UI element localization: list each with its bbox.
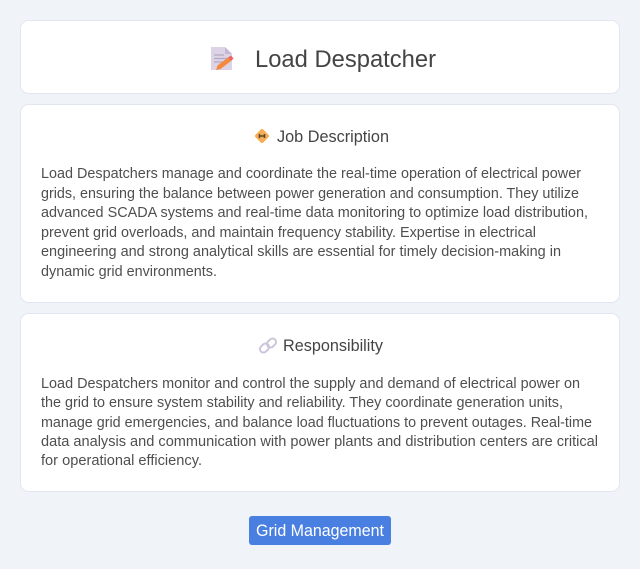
- text block: job description: grids, ensuring the balance between power generation and consumption. They utilize: [41, 186, 579, 202]
- text block: responsibility: data analysis and communication with power plants and distribution centers are critical: [41, 434, 598, 450]
- heading: job description: Job Description: [277, 128, 389, 146]
- text block: job description: Load Despatchers manage and coordinate the real-time operation of electrical power: [41, 166, 581, 182]
- panel: responsibility: [20, 314, 620, 492]
- text block: job description: [41, 166, 588, 280]
- heading: responsibility: Responsibility: [283, 337, 384, 355]
- panel: title card: [20, 20, 620, 94]
- text block: responsibility: for operational efficiency.: [41, 453, 202, 469]
- tag button: grid management: Grid Management: [256, 522, 384, 540]
- panel: job description: [20, 104, 620, 302]
- icon: document with pencil: [211, 47, 234, 70]
- text block: job description: prevent grid overloads, and maintain frequency stability. Expertise in electrical: [41, 225, 536, 241]
- text block: job description: advanced SCADA systems and real-time data monitoring to optimize load distribution,: [41, 205, 588, 221]
- title: Load Despatcher: [255, 46, 436, 73]
- text block: responsibility: Load Despatchers monitor and control the supply and demand of electrical power on: [41, 376, 580, 392]
- tag button: grid management: [249, 516, 391, 545]
- text block: responsibility: the grid to ensure system stability and reliability. They coordinate generation units,: [41, 395, 563, 411]
- text block: job description: engineering and strong analytical skills are essential for timely decision-making in: [41, 244, 561, 260]
- text block: responsibility: manage grid emergencies, and balance load fluctuations to prevent outages. Real-time: [41, 415, 592, 431]
- text block: responsibility: [41, 376, 598, 469]
- text block: job description: dynamic grid environments.: [41, 264, 217, 280]
- icon: chain link: [258, 337, 278, 354]
- icon: diamond road sign: [254, 128, 270, 144]
